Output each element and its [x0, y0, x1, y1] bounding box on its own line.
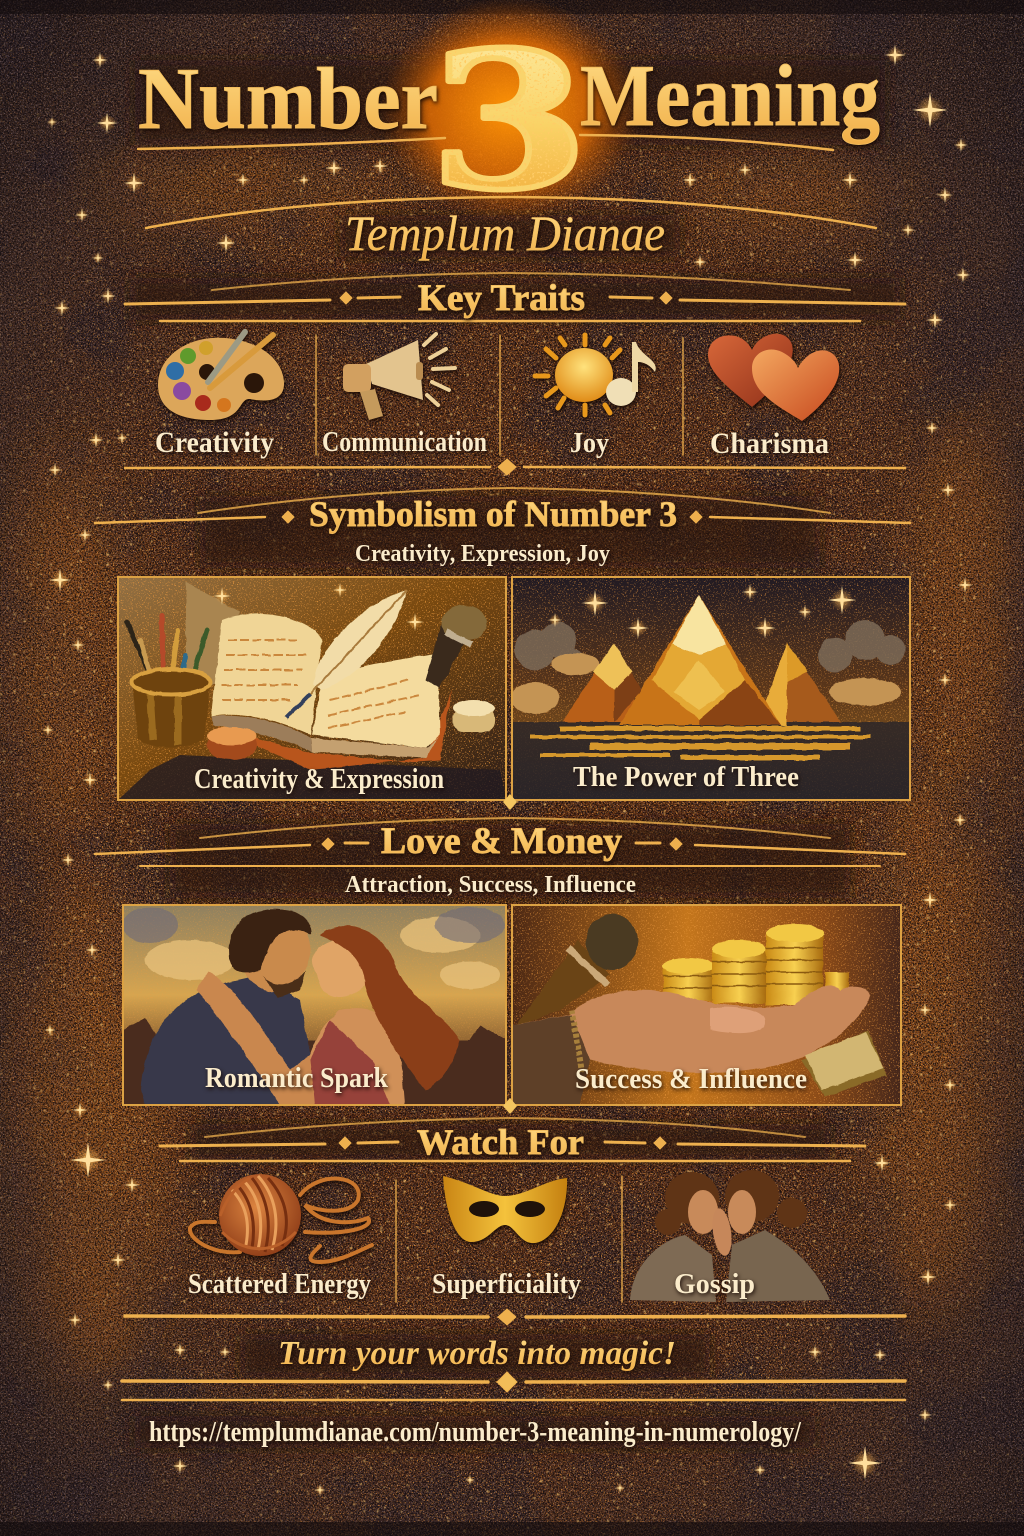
water: [512, 722, 910, 800]
divider diamond: [503, 794, 517, 810]
banknotes: [802, 1030, 887, 1097]
coin stacks: [662, 924, 849, 1005]
subheading: Creativity, Expression, Joy: [355, 541, 610, 567]
heading: Watch For: [417, 1122, 584, 1162]
heading: Love & Money: [381, 821, 622, 862]
clouds: [511, 620, 905, 714]
heading: Symbolism of Number 3: [309, 494, 677, 534]
stars: [548, 584, 856, 639]
title: Number 3 Meaning: [138, 0, 880, 232]
section: Symbolism of Number 3: [95, 488, 910, 567]
website URL: https://templumdianae.com/number-3-meaning-in-numerology/: [149, 1416, 802, 1448]
separators: [396, 1176, 622, 1302]
warning labels: Scattered Energy: [188, 1269, 371, 1300]
trait labels: Creativity: [155, 426, 274, 459]
man: [141, 909, 320, 1105]
separators: [316, 335, 683, 455]
title underlines: [138, 135, 833, 150]
icon: sun and music note: [535, 335, 656, 415]
woman: [196, 926, 460, 1105]
quill: [286, 590, 407, 718]
panel: Success & Influence: [512, 905, 901, 1105]
loose paper: [185, 582, 240, 686]
heading ornaments: [125, 273, 905, 321]
panel: Romantic Spark: [122, 905, 506, 1105]
caption: Romantic Spark: [205, 1063, 388, 1094]
bottom divider: [125, 459, 905, 475]
callout: Turn your words into magic!: [122, 1309, 905, 1400]
warning labels: Superficiality: [432, 1269, 581, 1300]
section: Key Traits: [125, 273, 905, 475]
word: Number: Number: [138, 51, 438, 148]
word: Meaning: Meaning: [580, 48, 880, 145]
trait labels: [155, 426, 829, 460]
icon: golden mask: [443, 1176, 567, 1243]
trait labels: Charisma: [710, 427, 829, 460]
heading: Key Traits: [418, 278, 585, 319]
microphone: [425, 605, 487, 688]
subtitle: Templum Dianae: [146, 197, 876, 261]
wax cylinders: [207, 700, 495, 760]
icon: two hearts: [708, 334, 839, 421]
panel: The Power of Three: [511, 577, 910, 800]
divider diamond: [503, 1098, 517, 1114]
callout: Turn your words into magic!: Turn your words into magic!: [278, 1335, 676, 1372]
icon: palette: [158, 332, 284, 420]
caption: Creativity & Expression: [194, 764, 444, 795]
big numeral 3: 3: [429, 11, 589, 232]
subtitle: Templum Dianae: Templum Dianae: [345, 205, 665, 261]
subheading: Attraction, Success, Influence: [345, 872, 636, 898]
section: Watch For: [160, 1118, 865, 1302]
hand: [512, 986, 870, 1105]
warning labels: [188, 1269, 755, 1300]
caption: The Power of Three: [573, 762, 799, 793]
trait labels: Joy: [570, 427, 609, 459]
icon: two women whispering: [630, 1170, 830, 1302]
trait labels: Communication: [322, 427, 487, 458]
warning labels: Gossip: [674, 1269, 755, 1300]
brush cup: [127, 615, 211, 747]
open book: [211, 614, 452, 770]
icon: megaphone: [343, 334, 455, 420]
dark bands behind headings: [130, 60, 900, 1448]
pyramids: [562, 595, 841, 726]
panel: Creativity & Expression: [118, 577, 506, 800]
section: Love & Money: [95, 818, 905, 898]
microphone: [515, 914, 638, 1027]
icon: yarn ball: [190, 1174, 372, 1262]
caption: Success & Influence: [575, 1064, 807, 1095]
